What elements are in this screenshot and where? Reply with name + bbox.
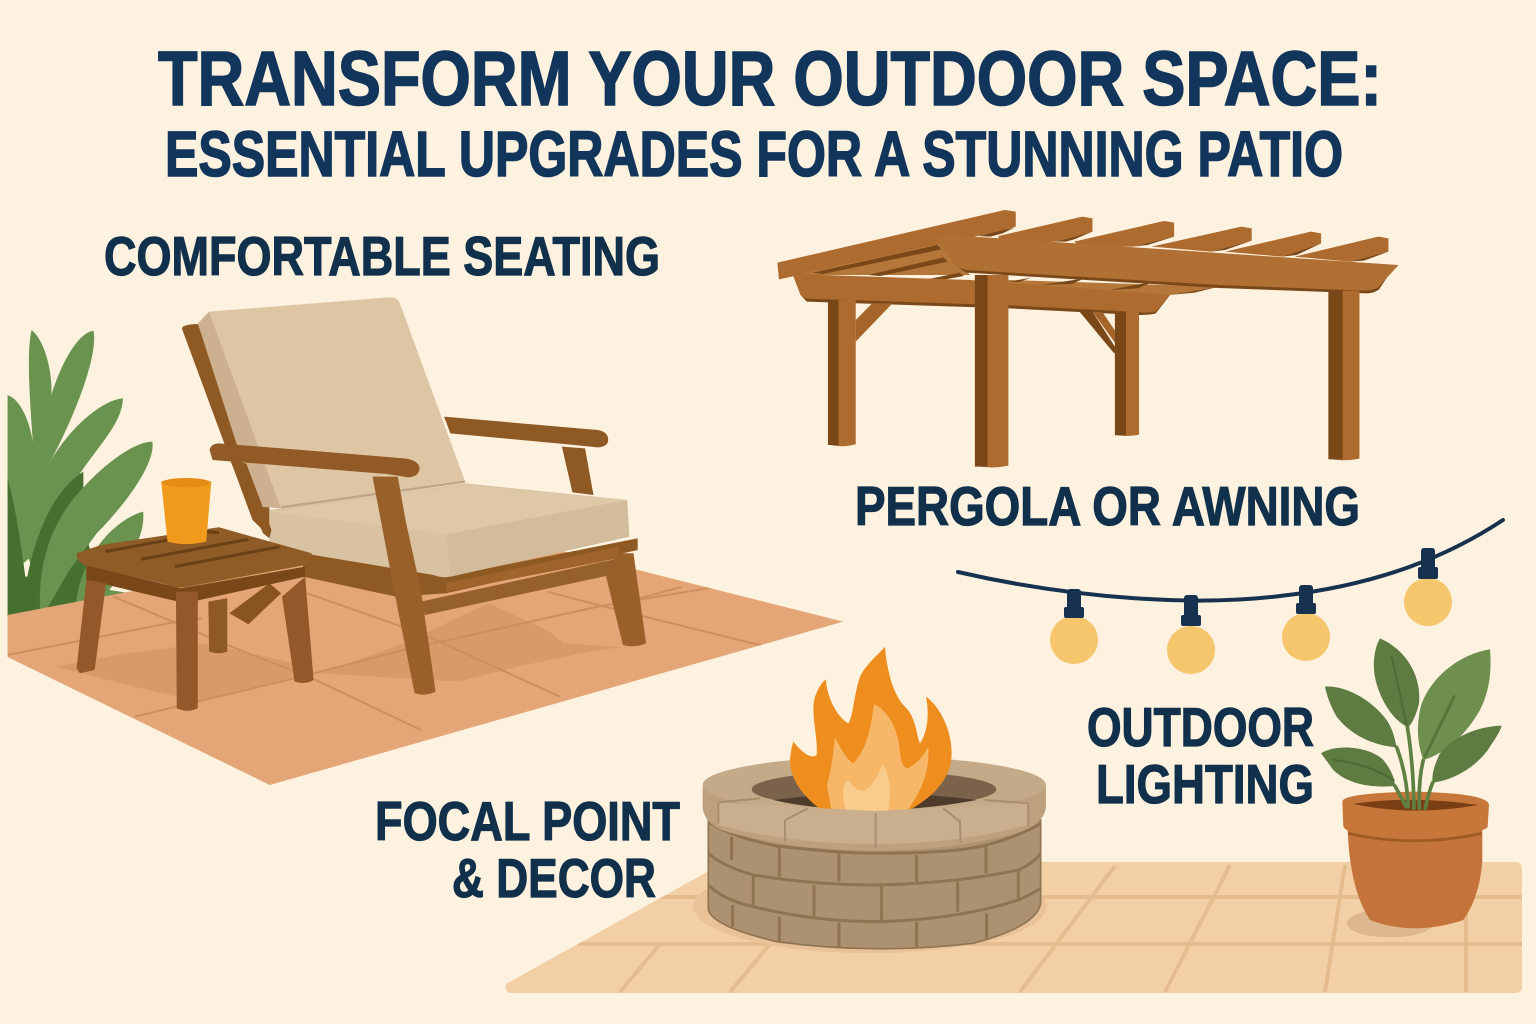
wire: [958, 520, 1503, 601]
pergola front beam: [937, 235, 1399, 293]
pergola post: left: [828, 300, 856, 446]
fire pit near rim: [718, 798, 1028, 848]
illustration: fire pit: [693, 647, 1047, 953]
pergola post: right: [1328, 291, 1359, 460]
pergola post: front centre: [975, 275, 1008, 467]
fire pit brick wall: [708, 820, 1041, 949]
chair: far arm support: [562, 447, 593, 495]
heading: focal point and decor: [375, 790, 680, 909]
chair: seat frame: [303, 538, 638, 615]
icon: orange cup: [161, 478, 211, 544]
pot body: [1342, 792, 1489, 928]
chair: rear lower arm post: [231, 462, 271, 538]
chair: rear right leg: [606, 553, 646, 646]
icon: background plant: [8, 330, 153, 618]
plant stems: [1395, 727, 1433, 808]
chair: back cushion: [198, 297, 465, 508]
patio floor: terracotta tiles: [8, 527, 843, 785]
chair: back frame: [182, 324, 269, 537]
fire pit ground shadow: [693, 860, 1047, 953]
title: [158, 36, 1382, 190]
chair: seat cushion: [269, 482, 629, 577]
chair: front leg: [372, 477, 436, 695]
heading: outdoor lighting: LIGHTING: [1096, 753, 1314, 815]
pergola post: back right: [1115, 312, 1139, 436]
chair: rear leg brace: [229, 583, 281, 624]
fire pit stone cap: [703, 757, 1046, 851]
heading: focal point and decor: & DECOR: [452, 847, 656, 909]
pergola braces: [856, 303, 1120, 353]
pergola back beam: [792, 274, 1170, 315]
string lights: [958, 520, 1503, 674]
heading: outdoor lighting: OUTDOOR: [1087, 696, 1314, 758]
flame: [790, 647, 952, 812]
heading: pergola or awning: PERGOLA OR AWNING: [855, 475, 1360, 537]
pergola rafters: [777, 210, 1388, 295]
chair: far arm rest: [444, 417, 608, 447]
pot shadow: [1347, 909, 1433, 937]
plant leaves: [1321, 638, 1502, 787]
side table: [77, 527, 314, 711]
heading: focal point and decor: FOCAL POINT: [375, 790, 680, 852]
heading: comfortable seating: COMFORTABLE SEATING: [104, 225, 660, 287]
illustration: pergola: [777, 210, 1399, 467]
bulb 3: [1282, 585, 1330, 661]
bulb 2: [1167, 595, 1215, 674]
illustration: plant, patio, chair and side table: [8, 297, 843, 785]
patio floor: sand tiles: [506, 862, 1522, 993]
bulb 1: [1050, 589, 1098, 664]
heading: outdoor lighting: [1087, 696, 1314, 815]
illustration: potted plant: [1321, 638, 1502, 937]
chair: near arm rest: [210, 443, 420, 477]
bulb 4: [1404, 548, 1452, 626]
